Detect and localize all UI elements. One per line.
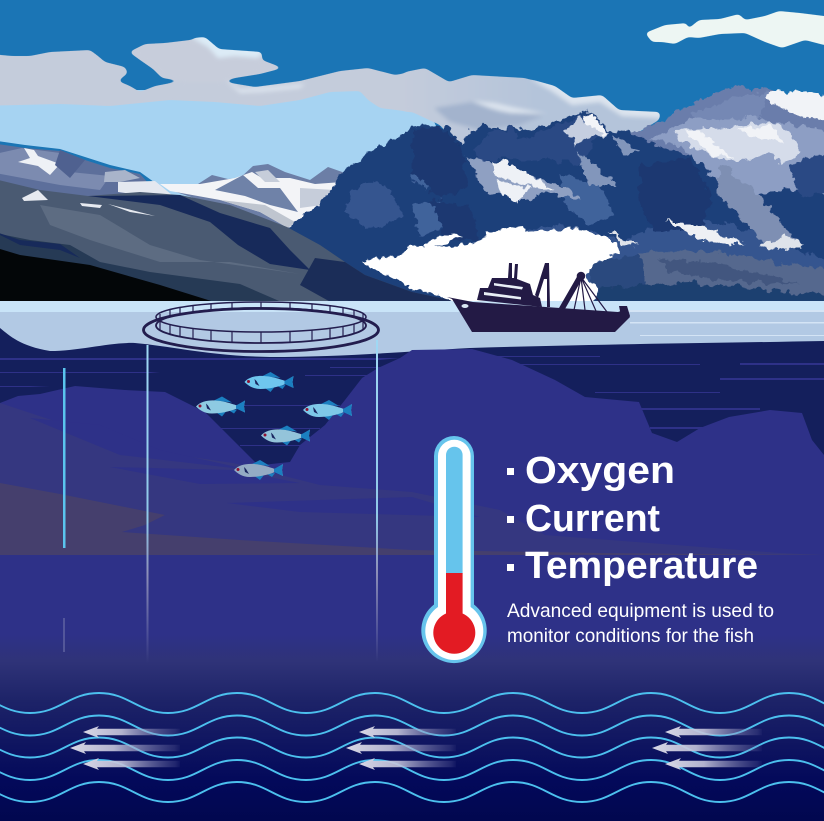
white ice sheet [361,226,618,310]
fish 5 [234,460,283,480]
snow crests [465,155,580,202]
vessel bow window [462,304,468,308]
water surface [0,301,824,361]
bullet: temperature [507,564,514,571]
back peak [610,87,824,310]
description line 1: Advanced equipment is used to [507,600,774,622]
crane cables [574,277,607,312]
cabin windows [484,283,523,300]
brown haze [0,483,824,555]
cloud: long grey band [0,50,412,112]
fish cage [144,302,378,352]
front mountain left [0,178,450,310]
bullet: oxygen [507,468,514,475]
far mountains left [0,140,375,232]
cloud: central grey [129,38,283,82]
fish 4 [261,426,310,446]
sky [0,0,824,310]
description [507,600,774,647]
monitored parameters list [507,450,758,587]
fish school [196,372,352,480]
bullet: current [507,516,514,523]
cage upper rail [156,302,366,332]
thermometer [421,436,487,663]
back mountain snow [650,108,824,195]
sensor line [63,368,66,652]
crane [559,275,582,309]
clouds [0,11,824,160]
cloud: white upper right [645,11,824,48]
label: current: Current [525,498,660,540]
A-frame mast [535,263,550,307]
right mountain range [288,87,824,310]
description line 2: monitor conditions for the fish [507,625,754,647]
current arrows: middle group [346,726,456,770]
label: temperature: Temperature [525,545,758,587]
deep gradient [0,555,824,821]
ridge shadows [790,150,824,198]
current arrows: right group [652,726,762,770]
vessel hull [447,297,630,332]
fish 1 [244,372,294,392]
current arrows: left group [70,726,180,770]
seabed haze [0,403,824,555]
net lines [146,340,378,663]
cage posts [160,302,363,343]
stern winch [619,306,630,316]
underwater [0,328,824,821]
cloud: blue-grey lower right [405,68,660,160]
fishing vessel [447,263,630,332]
snowfield peaks [170,164,375,232]
deep water background [0,328,824,821]
vessel superstructure [477,263,542,307]
current waves [0,693,824,802]
thermometer outline [421,436,487,663]
thermometer cold column [446,447,463,574]
fish 3 [303,400,352,420]
thermometer white glass [425,440,483,660]
thermometer red column and bulb [433,573,475,654]
fish 2 [196,396,245,416]
cage outer float ring [144,308,378,352]
cage lower rail [156,308,366,343]
cloud: darker inner wash [434,102,545,130]
cloud highlight streaks [225,79,660,118]
label: oxygen: Oxygen [525,450,675,492]
seabed haze lighter [30,418,480,517]
main dark range [288,111,824,310]
dark water streaks [0,356,824,446]
seabed silhouette [0,349,824,670]
